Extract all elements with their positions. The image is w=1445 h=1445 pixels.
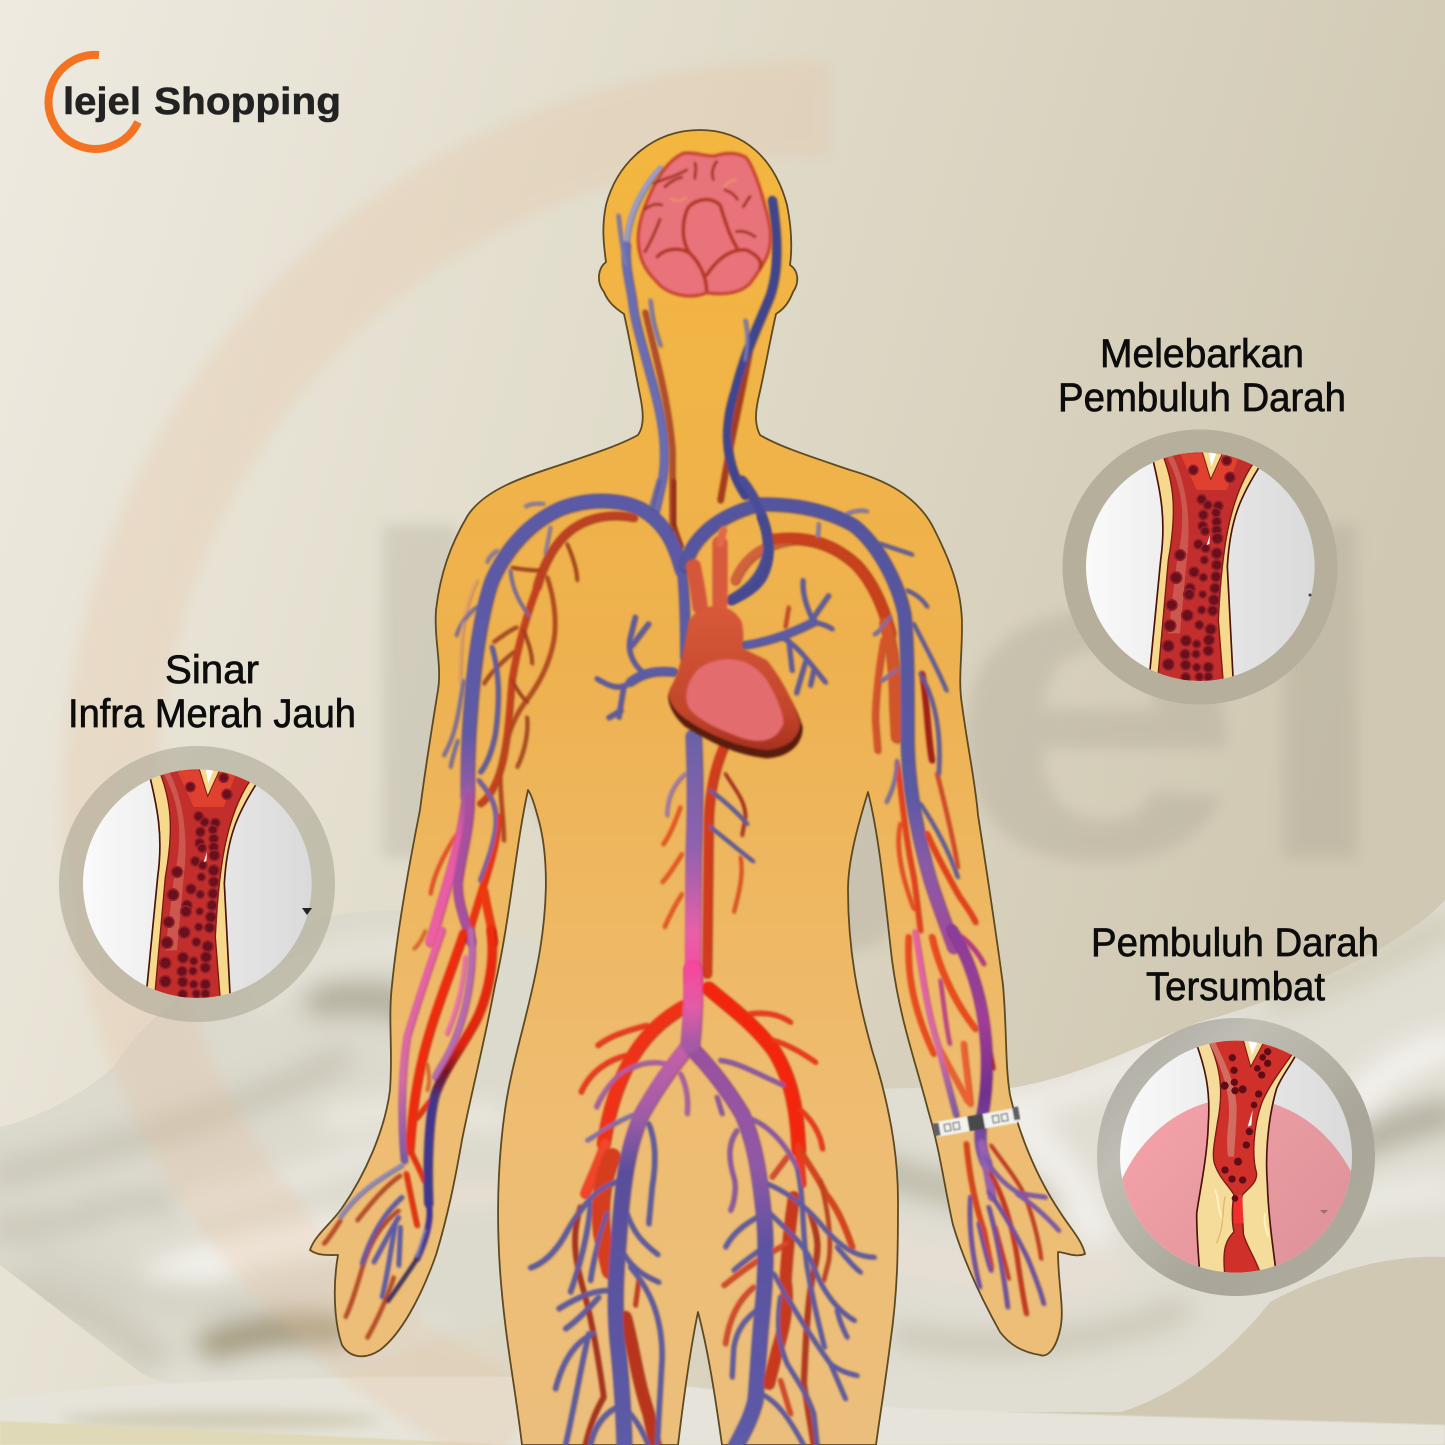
body silhouette bbox=[310, 130, 1085, 1445]
bracelet bbox=[932, 1106, 1021, 1137]
label: Melebarkan Pembuluh Darah bbox=[1058, 332, 1346, 420]
torso vessels bbox=[662, 737, 753, 980]
watermark: orange arc bbox=[110, 109, 830, 1430]
label: Sinar Infra Merah Jauh: Infra Merah Jauh bbox=[68, 692, 356, 736]
heart bbox=[668, 518, 803, 758]
silk cloth: right bbox=[860, 890, 1445, 1420]
label: Pembuluh Darah Tersumbat bbox=[1091, 921, 1379, 1009]
left shoulder and upper arm vessels bbox=[430, 480, 685, 942]
floor bottom strip left bbox=[0, 1421, 510, 1445]
logo text 2: Shopping bbox=[154, 81, 341, 123]
right forearm and hand vessels bbox=[908, 930, 1058, 1313]
label: Pembuluh Darah Tersumbat: Tersumbat bbox=[1146, 965, 1325, 1009]
floor platform bbox=[0, 1377, 1445, 1445]
circle: widened vessel bbox=[1062, 430, 1338, 704]
right shoulder and upper arm vessels bbox=[685, 480, 975, 947]
human body figure bbox=[310, 130, 1085, 1445]
logo text: lejel bbox=[63, 81, 141, 123]
label: Melebarkan Pembuluh Darah: Pembuluh Darah bbox=[1058, 376, 1346, 420]
floor shadow left bbox=[60, 1411, 380, 1429]
logo bbox=[49, 55, 341, 149]
label: Pembuluh Darah Tersumbat: Pembuluh Darah bbox=[1091, 921, 1379, 965]
great vessels bbox=[693, 530, 723, 607]
silk cloth: left bbox=[0, 940, 506, 1380]
label: Sinar Infra Merah Jauh bbox=[68, 648, 356, 736]
logo ring bbox=[49, 55, 138, 149]
circle: far infrared vessel bbox=[59, 746, 335, 1022]
loop over bbox=[732, 518, 769, 601]
head and neck vessels bbox=[618, 168, 776, 530]
circle: blocked vessel bbox=[1097, 1018, 1375, 1296]
left forearm and hand vessels bbox=[323, 930, 492, 1337]
watermark: brand letters: lejel bbox=[345, 443, 1395, 959]
ventricle bbox=[686, 659, 783, 741]
label: Sinar Infra Merah Jauh: Sinar bbox=[165, 648, 259, 692]
legs and pelvis vessels bbox=[530, 970, 874, 1445]
label: Melebarkan Pembuluh Darah: Melebarkan bbox=[1100, 332, 1304, 376]
brain bbox=[638, 153, 770, 296]
